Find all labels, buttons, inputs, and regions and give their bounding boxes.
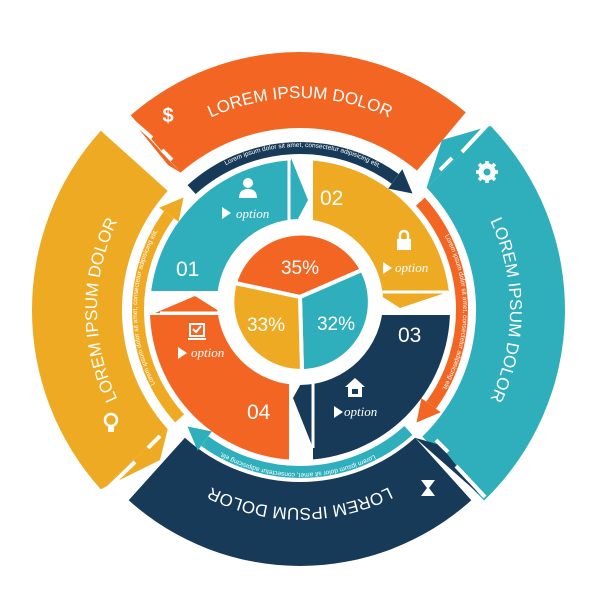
quadrant 04 orange: option [191, 345, 224, 360]
quadrant 02 yellow: 02 [320, 187, 343, 210]
icon: hourglass [421, 480, 435, 496]
pie chart: 33% [247, 315, 285, 336]
heading: top: LOREM IPSUM DOLOR [207, 86, 392, 118]
quadrant 02 yellow: option [395, 260, 428, 275]
quadrant 03 navy: 03 [398, 324, 421, 347]
icon: bulb [105, 414, 117, 432]
quadrant 03 navy: option [344, 404, 377, 419]
thin arrow: navy top [188, 142, 412, 194]
pie chart [232, 234, 370, 371]
icon: dollar: $ [162, 105, 174, 127]
thin arrow: teal bottom [188, 426, 412, 478]
outer segment: yellow left [32, 130, 168, 490]
thin arrow: teal bottom: Lorem ipsum dolor sit amet, consectetur adipisicing elit. [220, 452, 376, 478]
icon: home [345, 378, 365, 397]
thin arrow: orange right [416, 198, 468, 422]
icon: person [239, 178, 257, 198]
thin arrow: orange right: Lorem ipsum dolor sit amet, consectetur adipisicing elit. [442, 234, 468, 390]
pie chart: 32% [317, 314, 355, 335]
heading: right: LOREM IPSUM DOLOR [490, 217, 522, 402]
pie chart: 35% [281, 258, 319, 279]
quadrant 04 orange: 04 [247, 401, 271, 424]
quadrant 01 teal: 01 [176, 258, 199, 281]
quadrant 04 orange [150, 296, 289, 465]
icon: gear [476, 161, 498, 183]
thin arrow: yellow left: Lorem ipsum dolor sit amet, consectetur adipisicing elit. [132, 230, 158, 386]
outer segment: navy bottom [128, 438, 486, 566]
quadrant 01 teal [150, 150, 308, 291]
quadrant 02 yellow [313, 160, 449, 308]
thin arrow: navy top: Lorem ipsum dolor sit amet, consectetur adipisicing elit. [224, 142, 380, 168]
heading: bottom: LOREM IPSUM DOLOR [208, 487, 393, 520]
outer segment: teal right [422, 126, 565, 501]
outer segment: orange top [130, 52, 466, 173]
quadrant 01 teal: option [236, 206, 269, 221]
icon: lock [397, 231, 411, 250]
center white ring [217, 219, 383, 385]
icon: monitor check [188, 324, 206, 340]
thin arrow: yellow left [132, 198, 184, 422]
quadrant 03 navy [293, 315, 450, 460]
heading: left: LOREM IPSUM DOLOR [85, 218, 118, 403]
